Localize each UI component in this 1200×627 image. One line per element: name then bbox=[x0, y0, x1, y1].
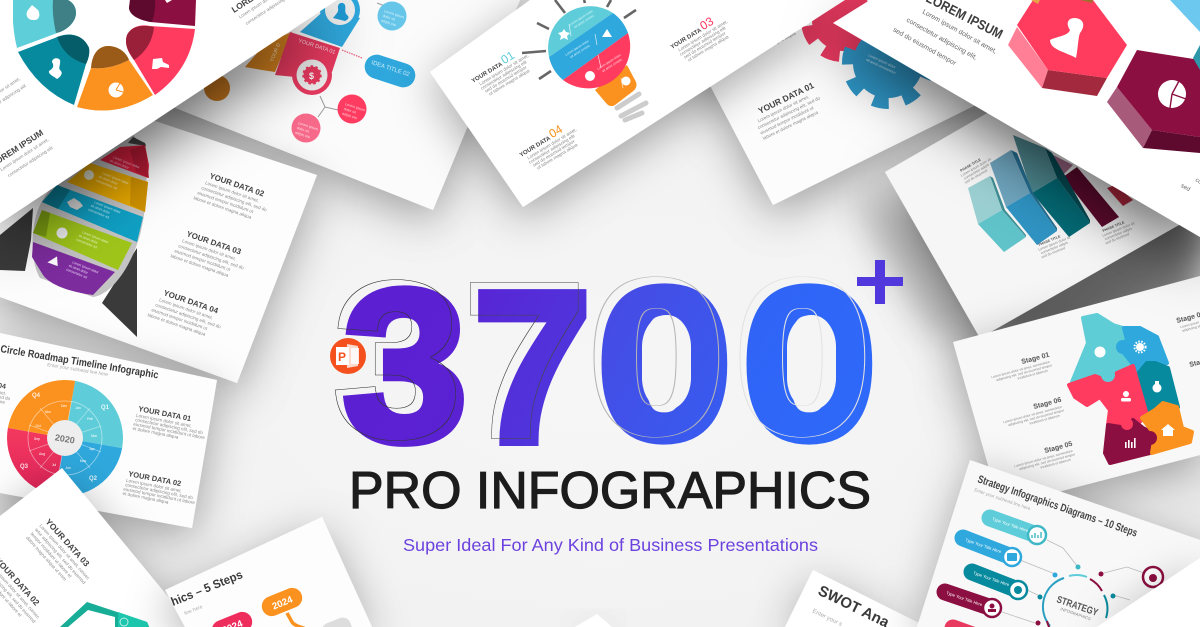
blue gear bbox=[848, 23, 928, 103]
text block: your data 03: consectetur adipiscing elit, sed do bbox=[178, 243, 245, 271]
connector dots bbox=[1036, 564, 1116, 626]
text block: your data 01: consectetur adipiscing elit, sed do bbox=[757, 95, 821, 130]
strategy pill 1 bbox=[990, 516, 1046, 544]
roadmap donut chart: Jul bbox=[52, 463, 56, 467]
teal hexagon graphic bbox=[60, 602, 155, 627]
lightbulb graphic: Lorem ipsum dolor bbox=[564, 39, 590, 57]
text block: your data 01: eiusmod tempor incididunt ut bbox=[759, 105, 815, 135]
text block: lorem ipsum lower: consectetur adipiscing elit bbox=[7, 145, 54, 178]
roadmap donut chart: 2020 bbox=[54, 432, 76, 446]
strategy pill 2 bbox=[963, 537, 1021, 566]
lightbulb graphic: sit amet consec bbox=[601, 57, 623, 73]
slide subtitle: line here bbox=[184, 604, 204, 617]
phase label left: PHASE TITLE bbox=[960, 157, 982, 173]
roadmap donut chart: Q2 bbox=[89, 476, 98, 482]
digit 3: 3 bbox=[343, 246, 467, 486]
body text: consectetur adipiscing elit, bbox=[905, 17, 978, 62]
idea map nodes: dolor sit bbox=[296, 126, 309, 134]
text block: lorem ipsum lower: Lorem ipsum dolor sit amet, bbox=[0, 137, 50, 172]
rocket graphic: consectetur ad bbox=[95, 178, 118, 191]
rocket graphic bbox=[0, 135, 149, 337]
roadmap donut chart: Q4 bbox=[32, 393, 41, 399]
text block: your data 01: Lorem ipsum dolor sit amet, bbox=[757, 94, 810, 123]
text block: your data 02: eiusmod tempor incididunt ut bbox=[197, 190, 255, 214]
text block: your data 01: labore et dolore magna aliqua bbox=[762, 110, 819, 141]
digit 0 second: 0 bbox=[742, 243, 877, 484]
digit outlines: 0 bbox=[589, 236, 724, 477]
stage 02 label: Lorem ipsum bbox=[1180, 320, 1200, 329]
icon: powerpoint bbox=[330, 338, 366, 374]
stage 06 label: adipiscing elit, sed do eiusmod tempor bbox=[1008, 408, 1065, 427]
bulb base lines bbox=[617, 94, 646, 120]
text block: your data 04: YOUR DATA 04 bbox=[162, 288, 220, 316]
panel: horse puzzle slide bbox=[953, 276, 1200, 507]
text block: your data 04: labore et dolore magna aliqua bbox=[147, 312, 206, 337]
panel: 5 steps slide bbox=[165, 517, 372, 627]
text block: your data 03: labore et dolore magna aliqua bbox=[170, 253, 229, 278]
roadmap donut chart: Mar bbox=[91, 434, 98, 438]
text block: your data 02: incididunt ut ad do bbox=[754, 20, 790, 41]
panel: hexagons slide top right bbox=[833, 0, 1200, 237]
text block: your data 01: Lorem ipsum dolor sit amet, bbox=[136, 413, 192, 428]
panel: strategy diagram slide bbox=[917, 460, 1200, 627]
panel: lightbulb slide bbox=[430, 0, 845, 207]
stage 05 label: adipiscing elit, sed do eiusmod tempor bbox=[1019, 452, 1076, 471]
text block: your data 01: sed do eiusmod tempor bbox=[484, 64, 528, 94]
connector bbox=[286, 612, 306, 627]
lightbulb graphic: Lorem ipsum dolor bbox=[596, 53, 622, 71]
text block: your data 02: labore et dolore magna aliqua bbox=[193, 195, 252, 220]
text block: your data 01: et dolore magna aliqua bbox=[132, 426, 179, 440]
stage 06 label: Stage 06 bbox=[1033, 397, 1062, 411]
stage 01 label: adipiscing elit, sed do eiusmod tempor bbox=[996, 363, 1053, 382]
text block: your data 02: sit amet, bbox=[761, 20, 778, 32]
text block: your data 04: eiusmod tempor incididunt ut bbox=[151, 307, 209, 331]
slide title: hics – 5 Steps bbox=[169, 567, 245, 609]
roadmap donut chart: Oct bbox=[35, 424, 41, 428]
text block: your data 02: YOUR DATA 02 bbox=[128, 469, 182, 488]
horse puzzle icons bbox=[1094, 342, 1175, 448]
text block: your data 04: Lorem ipsum dolor sit amet, bbox=[159, 297, 214, 320]
roadmap donut chart: Jun bbox=[65, 466, 71, 470]
digit outlines: 3 bbox=[335, 240, 459, 480]
phase label left: Lorem ipsum dolor sit bbox=[960, 157, 992, 178]
panel: swot slide bbox=[785, 570, 927, 627]
lightbulb graphic: sit amet consec bbox=[573, 13, 595, 29]
phase label bottom right: consectetur adipis bbox=[1104, 227, 1133, 241]
plus sign bbox=[857, 260, 903, 304]
rocket graphic: Lorem ipsum dolor bbox=[102, 171, 130, 186]
text block: your data 02: Lorem ipsum dolor sit amet, bbox=[205, 180, 260, 203]
text block: your data 04: ut labore magna aliqua bbox=[536, 142, 579, 170]
text block: your data 03: YOUR DATA 03 bbox=[44, 517, 92, 569]
stage 01 label: Lorem ipsum dolor sit amet, consectetur bbox=[991, 360, 1051, 379]
roadmap donut chart: Sep bbox=[34, 437, 40, 441]
strategy centre ring bbox=[1043, 575, 1107, 627]
text block: your data 03: tetur adipiscing elit, sed do eiusmod bbox=[34, 527, 87, 585]
text block: your data 01: YOUR DATA 01 bbox=[138, 404, 192, 423]
slide title: Strategy Infographics Diagrams – 10 Steps bbox=[976, 473, 1139, 540]
text fragments right: sed bbox=[1179, 183, 1191, 193]
slide subtitle: Enter your subhead line here bbox=[974, 487, 1032, 511]
strategy centre ring: STRATEGY bbox=[1055, 594, 1100, 619]
rocket graphic: consectetur ad bbox=[87, 207, 110, 220]
text block: your data 03: dolore magna aliqua ut enim bbox=[25, 535, 68, 582]
extra shading left of phase slide bbox=[850, 185, 970, 345]
horse puzzle graphic bbox=[1069, 315, 1192, 463]
main title: PRO INFOGRAPHICS bbox=[349, 462, 871, 520]
text block: your data 01: Lorem ipsum dolor sit amet, bbox=[478, 53, 529, 86]
red gear bbox=[807, 0, 879, 56]
text block: your data 02: et dolore magna aliqua bbox=[122, 491, 169, 505]
phase label bottom centre: PHASE TITLE bbox=[1038, 234, 1062, 247]
text block: your data 03: Lorem ipsum dolor sit amet, bbox=[182, 238, 237, 261]
phase label bottom centre: sed do eiusmod bbox=[1041, 246, 1066, 259]
text block: your data 04: sed do eiusmod tempor bbox=[532, 138, 576, 168]
rocket graphic: sit amet dolor bbox=[90, 204, 111, 215]
roadmap donut chart bbox=[7, 380, 123, 496]
text block: your data 01: YOUR DATA 01 bbox=[756, 80, 816, 116]
rocket graphic: sit amet dolor bbox=[98, 175, 119, 186]
timeline pill pink bbox=[212, 612, 252, 627]
strategy pill 3: Type Your Title Here bbox=[973, 570, 1011, 587]
phase label left: sed do eiusmod bbox=[964, 169, 988, 185]
rocket graphic: sit amet dolor bbox=[78, 234, 99, 245]
text block: your data 03: eiusmod tempor incididunt ut bbox=[174, 248, 232, 272]
text block: your data 04: YOUR DATA 04 bbox=[519, 122, 565, 159]
red hexagon bbox=[1008, 0, 1127, 96]
text block: your data 01: YOUR DATA 01 bbox=[471, 48, 517, 85]
phase label bottom right: sed do eiusmod bbox=[1105, 232, 1130, 245]
text block: your data 04: Lorem ipsum dolor sit amet, bbox=[526, 127, 577, 160]
lightbulb graphic bbox=[522, 0, 646, 120]
stage 06 label: Lorem ipsum dolor sit amet, consectetur bbox=[1003, 405, 1063, 424]
lightbulb graphic: Lorem ipsum dolor bbox=[568, 9, 594, 27]
timeline pill orange bbox=[262, 588, 302, 616]
body text: Lorem ipsum dolor sit amet, bbox=[921, 9, 998, 55]
text block: your data 02: eiusmod tempor incididunt bbox=[739, 27, 790, 56]
blue gear: sit amet consectetur bbox=[865, 58, 897, 75]
panel: 3d phase bars slide bbox=[885, 100, 1200, 338]
phase label bottom right: PHASE TITLE bbox=[1102, 220, 1126, 233]
text block: your data 03: Lorem ipsum dolor sit amet, consec bbox=[38, 523, 91, 581]
text block: your data 03: YOUR DATA 03 bbox=[670, 14, 716, 51]
text block: your data 01: consectetur adipiscing elit bbox=[480, 59, 528, 91]
panel: hexagon data slide bottom left bbox=[0, 468, 193, 627]
bulb orange base bbox=[595, 65, 636, 106]
slide title: Circle Roadmap Timeline Infographic bbox=[0, 343, 159, 381]
strategy pill 2: Type Your Title Here bbox=[965, 537, 1003, 554]
text block: your data 03: YOUR DATA 03 bbox=[185, 229, 243, 257]
maroon hexagon bbox=[1107, 50, 1200, 153]
blue gear: Lorem ipsum dolor bbox=[868, 53, 897, 70]
panel: pie segments slide top left bbox=[0, 0, 337, 223]
idea map nodes: IDEA TITLE 02 bbox=[370, 60, 411, 78]
text block: your data 02: Lorem ipsum dolor sit amet, bbox=[126, 478, 182, 493]
right node icon bbox=[1143, 567, 1163, 587]
roadmap donut chart: Dec bbox=[61, 404, 67, 408]
rocket graphic: consectetur ad bbox=[65, 267, 88, 280]
small white slide corner bbox=[575, 614, 612, 627]
stage 05 label: incididunt ut laborum bbox=[1040, 458, 1072, 470]
rocket graphic: Lorem ipsum dolor bbox=[94, 200, 122, 215]
roadmap donut chart: May bbox=[80, 459, 87, 463]
connector lines bbox=[1002, 540, 1150, 623]
stage 05 label: Stage 05 bbox=[1044, 441, 1073, 455]
text block: your data 01: consectetur adipiscing elit, sed do bbox=[135, 417, 204, 435]
idea map nodes: YOUR D bbox=[269, 42, 282, 63]
large number 3700 bbox=[335, 236, 877, 488]
strategy pill 4 bbox=[945, 590, 1001, 617]
rocket graphic: Lorem ipsum dolor bbox=[113, 155, 141, 170]
phase label bottom right: Lorem ipsum dolor sit bbox=[1102, 221, 1135, 238]
digit outlines bbox=[335, 236, 870, 481]
text block: your data 03: sed do eiusmod tempor bbox=[683, 30, 727, 60]
digit outlines: 0 bbox=[735, 236, 870, 477]
rocket graphic: sit amet dolor bbox=[109, 159, 130, 170]
phase label bottom centre: Lorem ipsum dolor sit bbox=[1038, 235, 1071, 252]
text block: your data 03: ut labore magna aliqua bbox=[687, 34, 730, 62]
idea map nodes: Lorem ipsum bbox=[384, 9, 405, 19]
text block: your data 01: ut labore magna aliqua bbox=[488, 68, 531, 96]
roadmap donut chart: Q3 bbox=[20, 464, 29, 470]
stage 06 label: incididunt ut laborum bbox=[1029, 414, 1061, 426]
text block: your data 03: consectetur adipiscing elit bbox=[679, 25, 727, 57]
stage 05 label: Lorem ipsum dolor sit amet, consectetur bbox=[1014, 449, 1074, 468]
digit 7: 7 bbox=[474, 248, 591, 488]
idea map nodes: dolor sit bbox=[343, 107, 356, 115]
idea map nodes: YOUR DATA 01 bbox=[297, 38, 336, 56]
text block: your data 04: consectetur adipiscing elit, sed do bbox=[155, 302, 222, 330]
rocket graphic: consectetur ad bbox=[75, 237, 98, 250]
subtitle: Super Ideal For Any Kind of Business Presentations bbox=[403, 535, 818, 555]
idea map nodes: adipis ela bbox=[295, 131, 310, 139]
phase label bottom centre: consectetur adipis bbox=[1040, 241, 1069, 255]
panel: rocket slide bbox=[0, 70, 317, 383]
body text: sed do eiusmod tempor bbox=[892, 27, 958, 68]
roadmap donut chart: Jan bbox=[75, 406, 81, 410]
rocket graphic: Lorem ipsum dolor bbox=[72, 260, 100, 275]
text block: your data 02: labore et dolore magna aliqua bbox=[740, 31, 797, 62]
text block: your data 02: ATA 02 bbox=[749, 10, 777, 30]
roadmap donut chart: Q1 bbox=[101, 405, 110, 411]
text block: your data 02: eiusmod tempor incididunt ut labore bbox=[123, 486, 196, 505]
phase label left: consectetur adipis bbox=[963, 163, 990, 181]
strategy pill 4: Type Your Title Here bbox=[946, 590, 984, 607]
text block: your data 02: YOUR DATA 02 bbox=[208, 171, 266, 199]
idea map nodes: Lorem ipsum bbox=[345, 102, 366, 112]
digit 0 first: 0 bbox=[597, 243, 732, 484]
roadmap donut chart: Feb bbox=[87, 417, 93, 421]
panel: circle roadmap slide bbox=[0, 333, 217, 528]
gray blob bbox=[322, 618, 352, 627]
panel: idea map slide bbox=[100, 0, 520, 210]
extra shading under phase slide bbox=[985, 222, 1200, 345]
text block: your data 03: Lorem ipsum dolor sit amet, bbox=[677, 19, 728, 52]
rocket graphic: Lorem ipsum dolor bbox=[82, 230, 110, 245]
roadmap donut chart: Apr bbox=[89, 447, 96, 451]
roadmap donut chart: Nov bbox=[45, 410, 51, 414]
idea map nodes: adipis ela bbox=[381, 19, 396, 27]
panel: corner slide bottom right bbox=[1097, 558, 1200, 627]
digit outlines: 7 bbox=[466, 241, 583, 481]
pie diagram bbox=[13, 0, 196, 111]
stage 01 label: Stage 01 bbox=[1021, 352, 1050, 366]
rocket graphic: sit amet dolor bbox=[68, 264, 89, 275]
bulb rays bbox=[522, 0, 636, 79]
lightbulb graphic: sit amet consec bbox=[569, 43, 591, 59]
idea map nodes: Lorem ipsum bbox=[298, 121, 319, 131]
roadmap donut chart: Aug bbox=[39, 452, 45, 456]
stage 01 label: incididunt ut laborum bbox=[1017, 369, 1049, 381]
timeline pill orange: 2024 bbox=[271, 594, 295, 612]
idea map nodes: adipis ela bbox=[342, 112, 357, 120]
idea map nodes: dolor sit bbox=[382, 14, 395, 22]
icon: powerpoint: P bbox=[338, 350, 346, 364]
text block: your data 02: consectetur adipiscing elit, sed do bbox=[125, 482, 194, 500]
strategy pill 3 bbox=[972, 570, 1027, 599]
idea map nodes bbox=[204, 0, 418, 142]
text block: your data 04: consectetur adipiscing elit bbox=[528, 133, 576, 165]
idea map nodes: $ bbox=[309, 71, 314, 81]
text block: your data 01: eiusmod tempor incididunt ut labore bbox=[133, 421, 206, 440]
neighbouring hexagons bbox=[1031, 0, 1200, 70]
panel: gears slide bbox=[665, 0, 1000, 205]
text block: your data 02: consectetur adipiscing elit, sed do bbox=[201, 185, 268, 213]
strategy pill 1: Type Your Title Here bbox=[992, 516, 1030, 533]
strategy centre ring: INFOGRAPHICS bbox=[1060, 606, 1092, 621]
3d bars chart bbox=[968, 135, 1133, 252]
text block: your data 03: tempor incididunt ut labore et bbox=[29, 531, 73, 579]
slide subtitle: Enter your subhead line here bbox=[47, 362, 109, 378]
